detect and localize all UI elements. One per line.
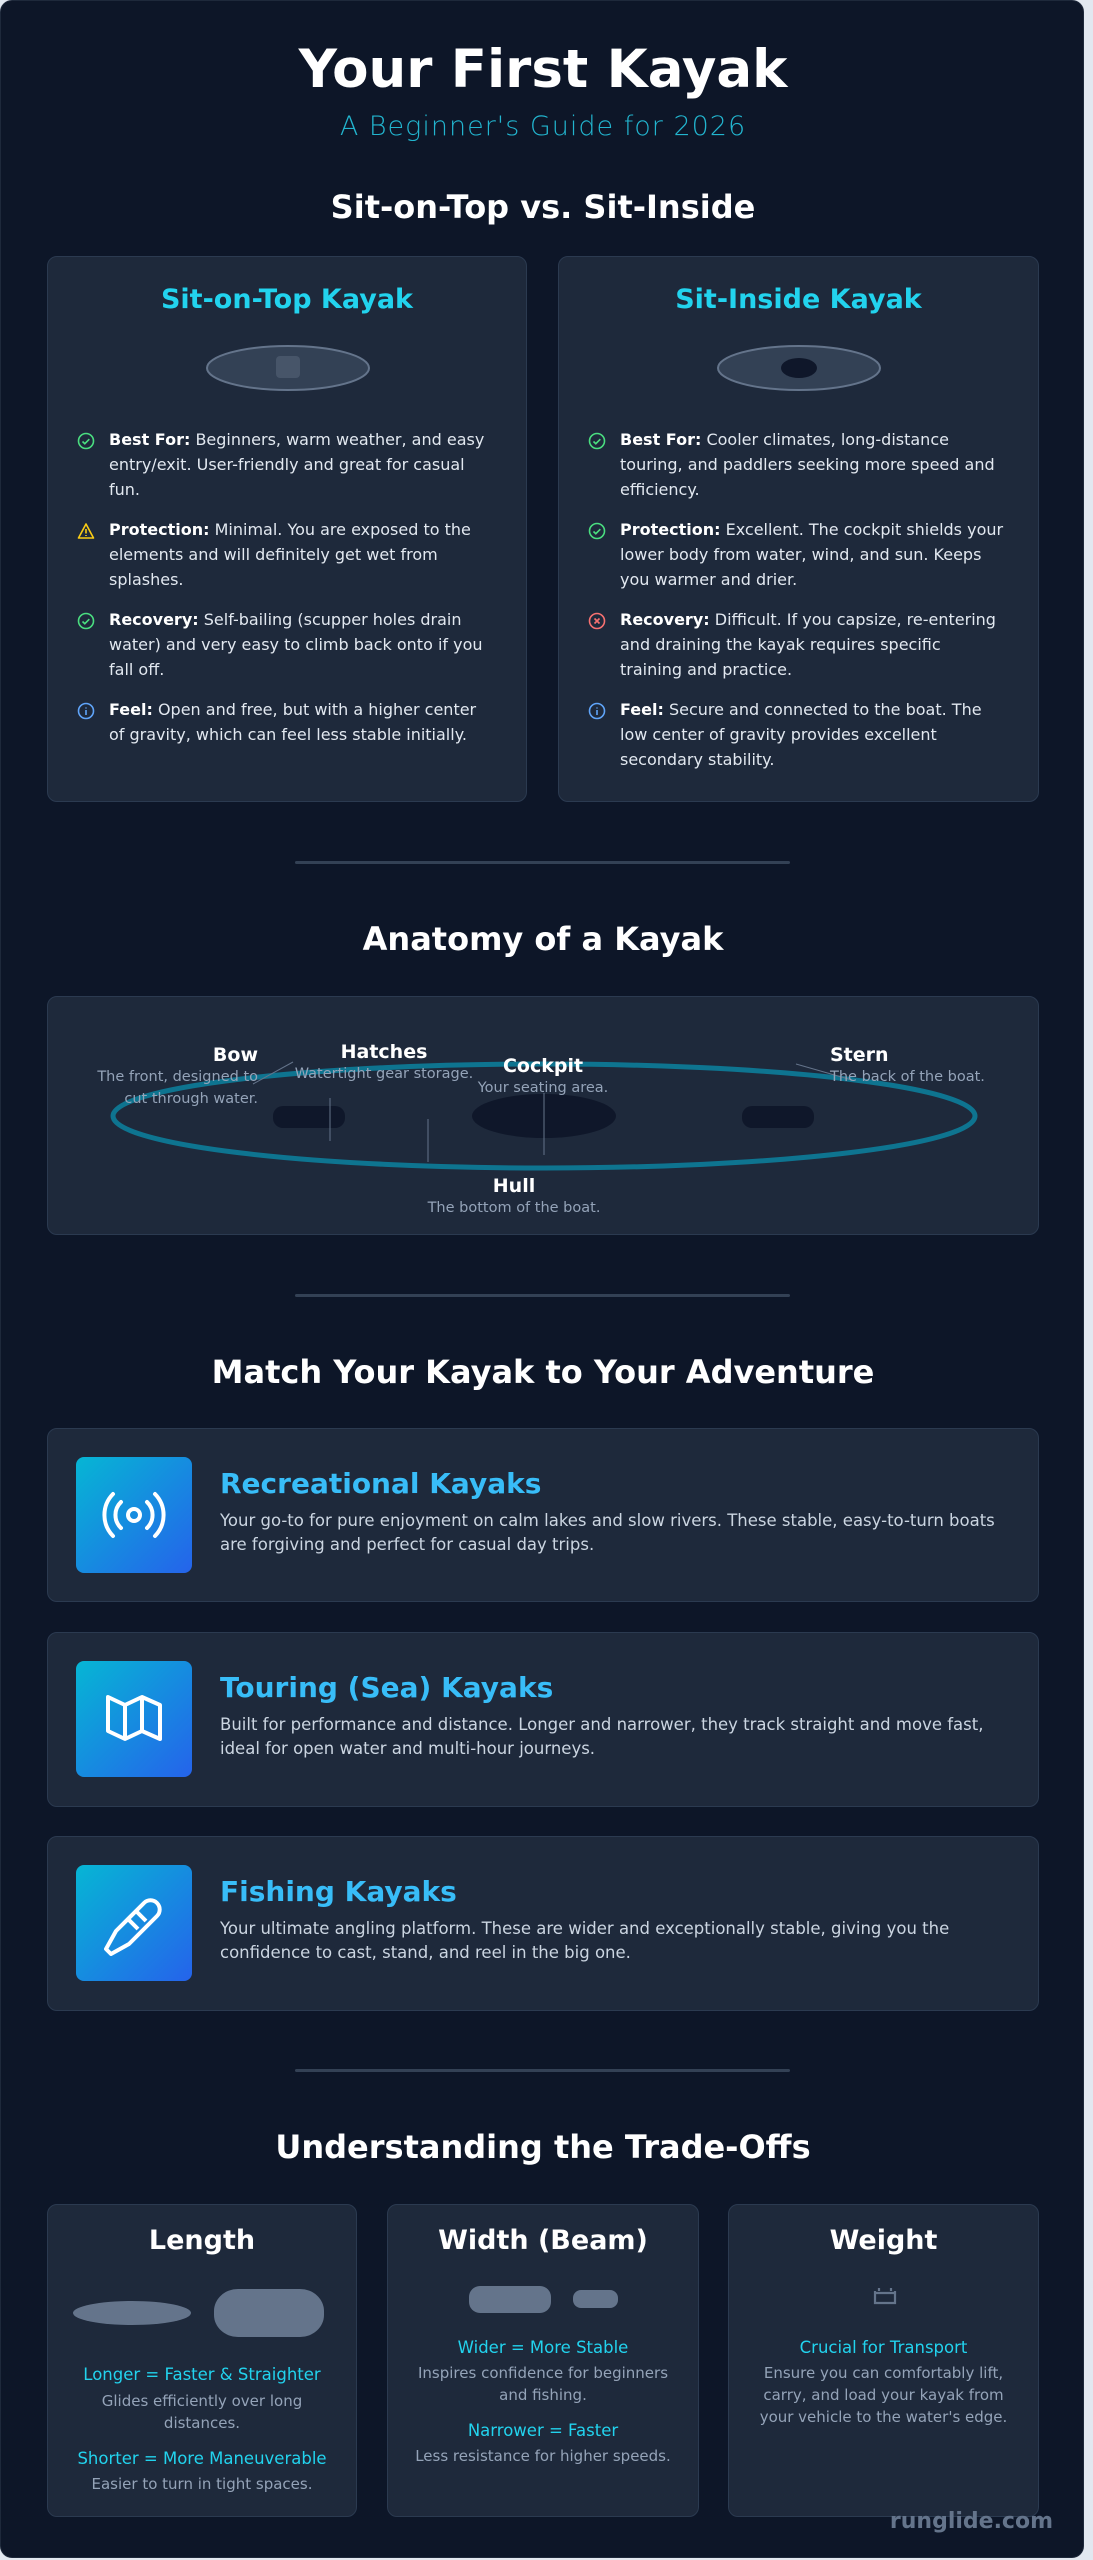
title: Recreational Kayaks <box>220 1467 541 1500</box>
card: width: Inspires confidence for beginners and fishing. <box>418 2364 668 2404</box>
footer: brand: runglide.com <box>890 2509 1053 2534</box>
item: feel: Feel: Open and free, but with a higher center of gravity, which can feel less stable initially. <box>109 700 476 744</box>
label: stern: Stern <box>830 1044 889 1066</box>
icon: signal <box>76 1457 192 1573</box>
label: hull: Hull <box>493 1175 535 1197</box>
label: hatches: Hatches <box>341 1041 427 1063</box>
label: hull <box>428 1175 600 1216</box>
heading: anatomy: Anatomy of a Kayak <box>363 920 723 958</box>
heading: Sit-on-Top Kayak <box>161 284 413 315</box>
heading: match: Match Your Kayak to Your Adventure <box>212 1353 874 1391</box>
label: stern: The back of the boat. <box>830 1069 985 1085</box>
item: best for: Best For: Cooler climates, long-distance touring, and paddlers seeking more speed and efficiency. <box>620 430 995 499</box>
card: fishing <box>47 1836 1039 2011</box>
text: transport: Crucial for Transport <box>800 2338 967 2357</box>
card: touring <box>47 1632 1039 1807</box>
card: recreational <box>47 1428 1039 1602</box>
item: feel: Feel: Secure and connected to the boat. The low center of gravity provides excellent secondary stability. <box>620 700 982 769</box>
description: Your go-to for pure enjoyment on calm lakes and slow rivers. These stable, easy-to-turn boats are forgiving and perfect for casual day trips. <box>220 1511 995 1554</box>
text: longer: Longer = Faster & Straighter <box>83 2365 321 2384</box>
text: wider: Wider = More Stable <box>458 2338 628 2357</box>
card: weight <box>728 2204 1039 2517</box>
label: bow: cut through water. <box>124 1091 258 1107</box>
card: width <box>387 2204 699 2517</box>
panel: anatomy diagram <box>47 996 1039 1235</box>
label: bow: The front, designed to <box>97 1069 258 1085</box>
label: hatches: Watertight gear storage. <box>295 1066 473 1082</box>
icon: width shapes <box>469 2286 618 2313</box>
icon: weight <box>874 2288 896 2304</box>
heading: Width (Beam) <box>438 2225 648 2256</box>
label: hull: The bottom of the boat. <box>428 1200 600 1216</box>
heading: sit-on-top vs sit-inside: Sit-on-Top vs. Sit-Inside <box>331 188 755 226</box>
label: hatches <box>295 1041 473 1082</box>
label: stern <box>830 1044 985 1085</box>
icon: length shapes <box>73 2289 324 2337</box>
icon: sit-inside kayak <box>717 345 881 391</box>
item: recovery: Recovery: Difficult. If you capsize, re-entering and draining the kayak requires specific training and practice. <box>620 610 996 679</box>
title: Fishing Kayaks <box>220 1875 457 1908</box>
card: width: Less resistance for higher speeds. <box>415 2447 671 2465</box>
heading: Sit-Inside Kayak <box>675 284 922 315</box>
subtitle: A Beginner's Guide for 2026 <box>340 111 746 142</box>
card: length: Easier to turn in tight spaces. <box>92 2475 312 2493</box>
icon: rod <box>76 1865 192 1981</box>
label: cockpit <box>478 1055 608 1096</box>
text: narrower: Narrower = Faster <box>468 2421 618 2440</box>
card: weight: Ensure you can comfortably lift, carry, and load your kayak from your vehicle to the water's edge. <box>760 2364 1007 2426</box>
title: Your First Kayak <box>299 39 787 100</box>
item: recovery: Recovery: Self-bailing (scupper holes drain water) and very easy to climb back onto if you fall off. <box>109 610 482 679</box>
description: Your ultimate angling platform. These are wider and exceptionally stable, giving you the confidence to cast, stand, and reel in the big one. <box>220 1919 949 1962</box>
diagram: kayak outline <box>110 1062 978 1170</box>
text: shorter: Shorter = More Maneuverable <box>77 2449 327 2468</box>
card: length <box>47 2204 357 2517</box>
title: Touring (Sea) Kayaks <box>220 1671 553 1704</box>
description: Built for performance and distance. Longer and narrower, they track straight and move fast, ideal for open water and multi-hour journeys. <box>220 1715 983 1758</box>
label: cockpit: Cockpit <box>503 1055 583 1077</box>
icon: sit-on-top kayak <box>206 345 370 391</box>
panel: sit-inside <box>558 256 1039 802</box>
card: length: Glides efficiently over long distances. <box>102 2392 302 2432</box>
heading: Weight <box>830 2225 937 2256</box>
label: bow <box>97 1044 258 1107</box>
heading: Length <box>149 2225 255 2256</box>
item: best for: Best For: Beginners, warm weather, and easy entry/exit. User-friendly and great for casual fun. <box>109 430 484 499</box>
label: cockpit: Your seating area. <box>478 1080 608 1096</box>
heading: trade-offs: Understanding the Trade-Offs <box>275 2128 811 2166</box>
label: bow: Bow <box>213 1044 258 1066</box>
item: protection: Protection: Excellent. The cockpit shields your lower body from water, wind, and sun. Keeps you warmer and drier. <box>620 520 1003 589</box>
panel: sit-on-top <box>47 256 527 802</box>
item: protection: Protection: Minimal. You are exposed to the elements and will definitely get wet from splashes. <box>109 520 471 589</box>
icon: map <box>76 1661 192 1777</box>
